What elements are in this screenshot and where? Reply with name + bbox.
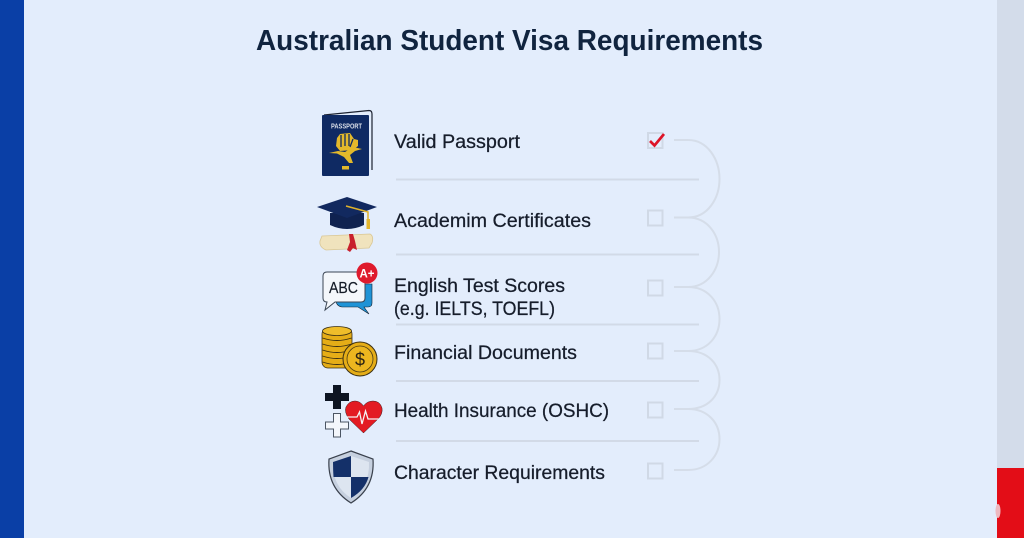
row 5: health insurance: [325, 385, 662, 437]
row 4: financial documents: [322, 326, 662, 376]
right grey band: [997, 0, 1024, 468]
icon: speech bubbles with A+ badge: [323, 262, 378, 314]
checkbox: checked: [648, 133, 664, 148]
icon: coin stack and dollar coin: $: [355, 350, 365, 370]
icon: shield: [329, 451, 373, 503]
label: financial documents: Financial Documents: [394, 342, 577, 364]
connector curves: [674, 140, 720, 470]
icon: speech bubbles with A+ badge: A+: [359, 268, 375, 280]
icon: graduation cap and diploma: [317, 197, 377, 252]
icon: passport: PASSPORT: [331, 122, 362, 130]
row 3: english test scores: [323, 262, 662, 320]
checkbox: [648, 402, 662, 418]
title: Australian Student Visa Requirements: [256, 25, 763, 57]
label: english test scores: English Test Scores: [394, 275, 565, 297]
left blue band: [0, 0, 24, 538]
row 6: character requirements: [329, 451, 662, 503]
icon: speech bubbles with A+ badge: ABC: [329, 280, 358, 297]
label: valid passport: Valid Passport: [394, 131, 521, 153]
icon: coin stack and dollar coin: [322, 326, 377, 376]
row 1: valid passport: [322, 110, 664, 176]
label: health insurance: Health Insurance (OSHC): [394, 400, 609, 422]
label: academic certificates: Academim Certificates: [394, 210, 591, 232]
red corner block: [996, 468, 1024, 538]
checkbox: [648, 280, 662, 296]
icon: crosses and heart: [325, 385, 382, 437]
checkbox: [648, 344, 662, 358]
label: english test scores: (e.g. IELTS, TOEFL): [394, 298, 555, 320]
icon: passport: [322, 110, 372, 176]
checkbox: [648, 210, 662, 226]
checkbox: [648, 464, 662, 478]
label: english test scores: [394, 275, 565, 320]
divider lines: [396, 180, 699, 441]
label: character requirements: Character Requirements: [394, 462, 605, 484]
row 2: academic certificates: [317, 197, 662, 252]
